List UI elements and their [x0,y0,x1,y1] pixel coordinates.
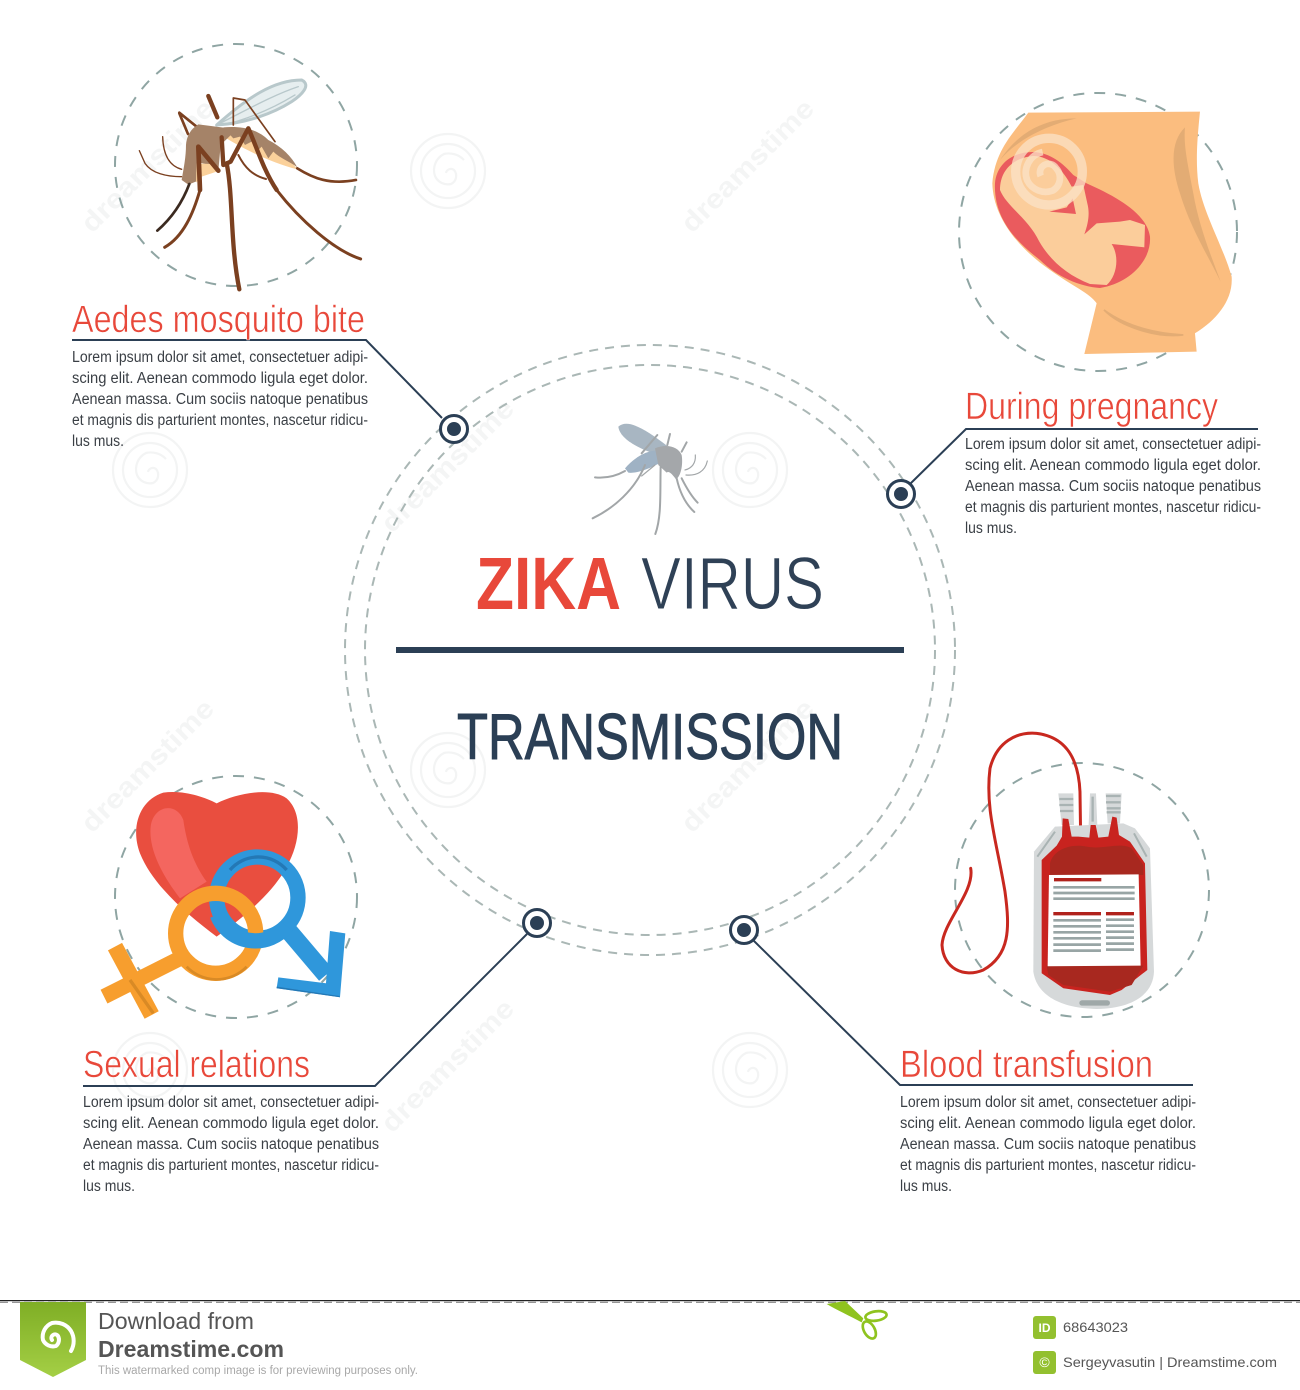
body text: Lorem ipsum dolor sit amet, consectetuer adipi- [900,1094,1196,1111]
central dashed rings [345,345,955,955]
body text: scing elit. Aenean commodo ligula eget dolor. [72,370,368,387]
footer: copyright [1033,1351,1277,1374]
title word: VIRUS: VIRUS [641,542,824,625]
body text: et magnis dis parturient montes, nascetur ridicu- [83,1157,379,1174]
footer: copyright: Sergeyvasutin | Dreamstime.com [1063,1354,1277,1370]
panel: during pregnancy [959,93,1261,537]
watermark pattern: dreamstime [675,693,820,838]
icon: blood bag [942,733,1154,1009]
body text: scing elit. Aenean commodo ligula eget dolor. [900,1115,1196,1132]
subtitle: transmission: TRANSMISSION [457,700,843,773]
watermark pattern [75,93,820,1138]
female symbol [104,955,187,997]
icon: central grey mosquito [593,424,707,534]
footer: download text: Dreamstime.com [98,1336,284,1362]
footer: image id [1033,1316,1128,1339]
body text: Lorem ipsum dolor sit amet, consectetuer adipi- [965,436,1261,453]
panel: blood transfusion [900,733,1209,1195]
body text: lus mus. [83,1178,135,1195]
body text: et magnis dis parturient montes, nascetur ridicu- [965,499,1261,516]
male symbol [289,932,326,975]
title word: ZIKA: ZIKA [476,542,621,625]
watermark pattern: dreamstime [375,393,520,538]
title divider [396,647,904,653]
footer: image id: 68643023 [1063,1319,1128,1335]
watermark pattern: dreamstime [75,693,220,838]
body text [83,1094,379,1195]
heading: Sexual relations [83,1044,310,1086]
body text [965,436,1261,537]
icon: pregnant belly [992,112,1232,354]
icon: brown mosquito [139,80,361,289]
heading: Aedes mosquito bite [72,299,365,341]
footer: copyright: © [1039,1354,1050,1370]
icon: heart and gender symbols [104,792,345,1015]
body text: lus mus. [900,1178,952,1195]
body text: lus mus. [72,433,124,450]
body text: Aenean massa. Cum sociis natoque penatibus [900,1136,1196,1153]
footer cut line [0,1300,1300,1302]
body text: et magnis dis parturient montes, nascetur ridicu- [72,412,368,429]
dashed ring [115,44,357,286]
connector: mosquito bite [72,340,442,418]
connector: sexual relations [83,934,527,1086]
footer: download text [98,1308,418,1377]
connector: blood transfusion [753,940,1193,1085]
body text: Lorem ipsum dolor sit amet, consectetuer adipi- [83,1094,379,1111]
title [476,542,824,625]
body text: Lorem ipsum dolor sit amet, consectetuer adipi- [72,349,368,366]
body text [900,1094,1196,1195]
footer: badge logo [20,1302,86,1377]
body text: lus mus. [965,520,1017,537]
panel: mosquito bite [72,44,368,450]
heading: During pregnancy [965,386,1218,428]
body text [72,349,368,450]
watermark swirl [1016,138,1082,205]
interlock overlap [217,915,287,941]
watermark pattern: dreamstime [675,93,820,238]
body text: Aenean massa. Cum sociis natoque penatibus [965,478,1261,495]
footer: download text: Download from [98,1308,254,1334]
body text: scing elit. Aenean commodo ligula eget dolor. [965,457,1261,474]
body text: Aenean massa. Cum sociis natoque penatibus [83,1136,379,1153]
body text: scing elit. Aenean commodo ligula eget dolor. [83,1115,379,1132]
panel: sexual relations [83,776,379,1195]
watermark pattern: dreamstime [75,93,220,238]
watermark pattern: dreamstime [375,993,520,1138]
body text: et magnis dis parturient montes, nascetur ridicu- [900,1157,1196,1174]
icon: scissors [827,1301,887,1341]
node markers [440,416,914,944]
body text: Aenean massa. Cum sociis natoque penatibus [72,391,368,408]
dashed ring [115,776,357,1018]
dashed ring [959,93,1237,371]
footer: download text: This watermarked comp image is for previewing purposes only. [98,1365,418,1377]
connector: pregnancy [910,429,1258,484]
dashed ring [955,763,1209,1017]
heading: Blood transfusion [900,1044,1153,1086]
footer: image id: ID [1038,1321,1051,1335]
